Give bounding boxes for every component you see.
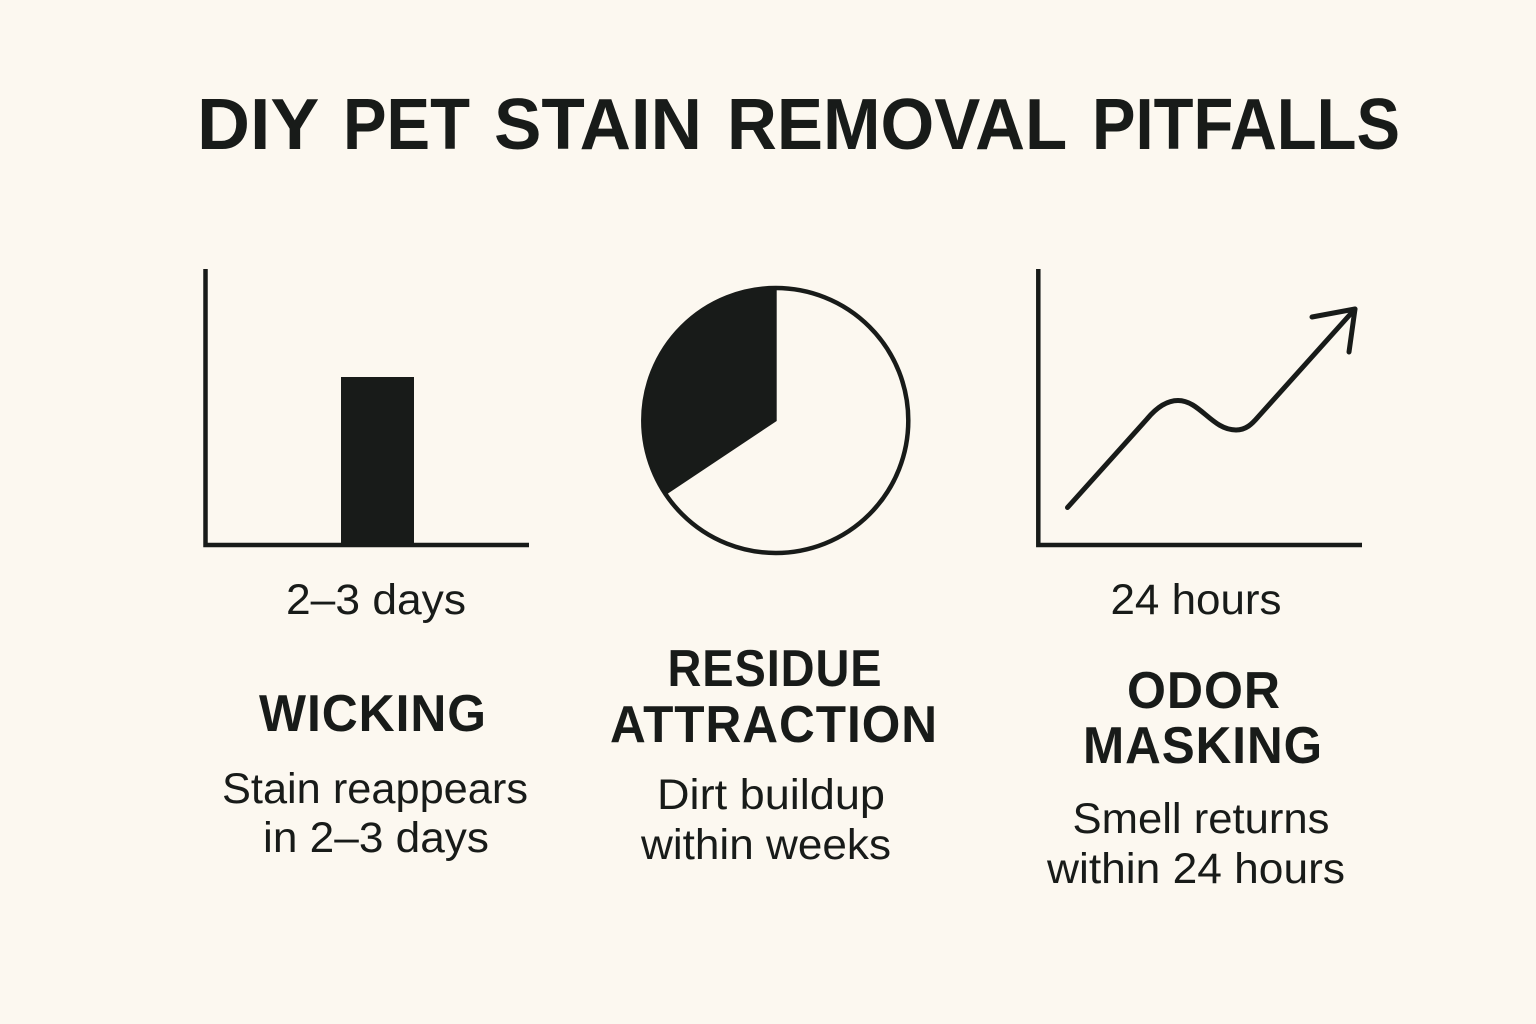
heading: odor masking: ODOR [1127,662,1281,720]
heading: residue attraction: RESIDUE [668,640,882,698]
heading: residue attraction: ATTRACTION [610,696,938,754]
panel: residue attraction [610,286,938,869]
panel: wicking [206,269,529,862]
description: odor masking: within 24 hours [1046,845,1345,893]
title: REMOVAL [727,85,1066,165]
description: residue attraction: Dirt buildup [657,771,885,819]
title: PET [343,85,470,165]
chart label: 24 hours: 24 hours [1110,576,1282,624]
description: wicking: in 2–3 days [263,814,489,862]
title: DIY [197,85,318,165]
line chart with arrow [1038,269,1362,545]
description: wicking: Stain reappears [222,765,528,813]
panel: odor masking [1038,269,1362,893]
description: residue attraction: within weeks [640,821,891,869]
chart label: 2–3 days: 2–3 days [286,576,466,624]
title: STAIN [494,85,702,165]
pie chart [643,286,908,553]
bar chart [206,269,529,545]
description: odor masking: Smell returns [1072,795,1330,843]
heading: wicking: WICKING [259,685,487,743]
title: PITFALLS [1092,85,1400,165]
heading: odor masking: MASKING [1083,717,1323,775]
